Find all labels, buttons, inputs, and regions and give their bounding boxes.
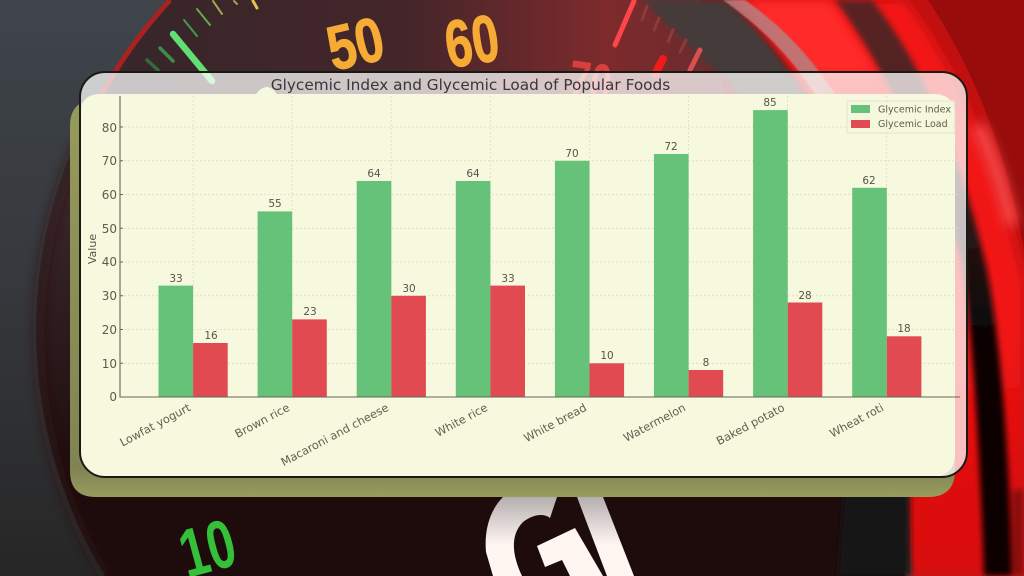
icon: gauge tick marks bbox=[147, 1, 700, 81]
bar value labels bbox=[169, 97, 911, 369]
y axis title: Value bbox=[86, 234, 99, 264]
gauge number 60: 60 bbox=[440, 1, 504, 83]
bar value labels: 85 bbox=[763, 97, 777, 109]
bar value labels: 16 bbox=[204, 330, 218, 342]
title: Glycemic Index and Glycemic Load of Popular Foods bbox=[271, 76, 670, 94]
y axis labels: 20 bbox=[102, 323, 117, 337]
y axis labels: 60 bbox=[102, 188, 117, 202]
green bars: Glycemic Index bbox=[158, 110, 887, 397]
bar value labels: 33 bbox=[169, 273, 183, 285]
y axis labels: 50 bbox=[102, 222, 117, 236]
bar value labels: 55 bbox=[268, 198, 282, 210]
legend: Glycemic Load: Glycemic Load bbox=[878, 119, 948, 130]
bar value labels: 28 bbox=[798, 290, 812, 302]
bar value labels: 10 bbox=[600, 350, 614, 362]
x axis labels: White rice bbox=[433, 401, 490, 440]
bar value labels: 23 bbox=[303, 306, 317, 318]
panel shadow bbox=[70, 100, 955, 497]
y axis labels: 0 bbox=[109, 390, 117, 404]
legend bbox=[847, 101, 955, 133]
bar value labels: 64 bbox=[466, 168, 480, 180]
gauge rim bbox=[80, 0, 170, 140]
outer dark streak bbox=[835, 0, 1012, 576]
bar value labels: 64 bbox=[367, 168, 381, 180]
gauge number 50: 50 bbox=[320, 4, 391, 85]
gauge letters GI: GI bbox=[540, 569, 542, 571]
x axis labels: Wheat roti bbox=[828, 401, 886, 440]
red bars: Glycemic Load bbox=[193, 286, 921, 397]
gauge letters GI bbox=[486, 497, 634, 576]
y axis labels: 40 bbox=[102, 255, 117, 269]
lower dark face bbox=[620, 300, 905, 576]
x axis labels bbox=[118, 401, 886, 469]
y axis labels bbox=[102, 121, 117, 404]
y axis labels: 10 bbox=[102, 357, 117, 371]
bar value labels: 8 bbox=[703, 357, 709, 369]
bar value labels: 30 bbox=[402, 283, 416, 295]
bar chart bbox=[86, 96, 960, 469]
x axis labels: Baked potato bbox=[714, 401, 787, 448]
bar value labels: 70 bbox=[565, 148, 579, 160]
chart background bbox=[81, 87, 955, 477]
y axis labels: 30 bbox=[102, 289, 117, 303]
legend: Glycemic Index: Glycemic Index bbox=[878, 104, 951, 116]
grid lines bbox=[120, 96, 960, 397]
x axis labels: Watermelon bbox=[621, 401, 688, 445]
bar value labels: 18 bbox=[897, 323, 911, 335]
x axis labels: White bread bbox=[522, 401, 589, 445]
bar value labels: 33 bbox=[501, 273, 515, 285]
bar value labels: 62 bbox=[862, 175, 876, 187]
x axis labels: Brown rice bbox=[233, 401, 292, 441]
x axis labels: Lowfat yogurt bbox=[118, 401, 193, 449]
right red housing bbox=[700, 0, 1024, 576]
right dark bezel bbox=[642, 0, 912, 576]
axes bbox=[120, 96, 960, 397]
panel: chart card bbox=[80, 72, 967, 477]
bar value labels: 72 bbox=[664, 141, 678, 153]
gauge number 70: 70 bbox=[564, 48, 616, 119]
y axis labels: 70 bbox=[102, 154, 117, 168]
x axis labels: Macaroni and cheese bbox=[279, 401, 391, 469]
y axis labels: 80 bbox=[102, 121, 117, 135]
